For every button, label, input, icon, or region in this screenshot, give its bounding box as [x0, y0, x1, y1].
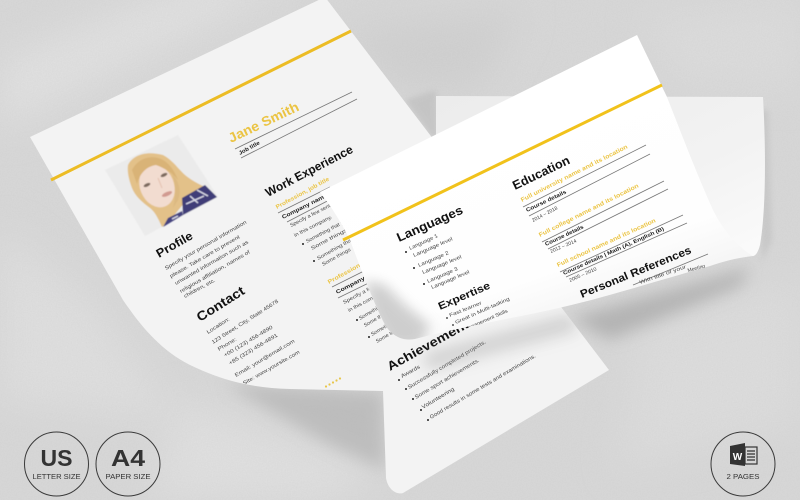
name and job title: Job title [238, 140, 261, 157]
section: personal references: With title of your [639, 264, 687, 286]
section: education: 2014 – 2018 [531, 205, 559, 224]
section: work experience: Some things [375, 324, 404, 345]
floor shadow under curled sheets [225, 90, 772, 470]
name and job title: Jane Smith [226, 99, 301, 146]
section: work experience: Specify a few sentences [289, 196, 345, 229]
section: achievements [385, 313, 537, 421]
section: languages: Language 2 [417, 250, 450, 269]
section: languages: Language level [430, 269, 471, 291]
section: work experience: Something that [316, 237, 355, 262]
section: education: Course details | Math (A), English (B) [562, 226, 665, 277]
section: contact: +00 (123) 456-4890 [223, 325, 274, 359]
section: work experience: Some things [363, 308, 392, 329]
section: languages [396, 208, 470, 289]
section: work experience: Something [370, 319, 397, 338]
yellow header rule [343, 85, 662, 240]
section: contact: Location: [206, 317, 231, 336]
section: work experience [263, 142, 404, 345]
section: work experience: Work Experience [263, 142, 356, 200]
section: work experience: in this company. [293, 214, 333, 239]
section: languages: Language level [421, 254, 463, 276]
section: work experience: Something [358, 303, 385, 322]
section: education: Education [510, 153, 572, 193]
back sheet: curled page corner on the right [436, 96, 765, 256]
section: education: Full university name and its location [520, 144, 629, 204]
section: expertise: Great in Multi-tasking [454, 296, 511, 326]
section: achievements: Good results in some tests and examinations. [429, 353, 537, 421]
badge: Word 2 pages: 2 PAGES [726, 474, 760, 481]
section: work experience: Some things [321, 247, 352, 268]
section: contact: Site: www.yoursite.com [242, 350, 301, 387]
yellow dot ornament [325, 377, 341, 388]
section: work experience: in this company [347, 289, 386, 314]
curl shading [365, 280, 430, 348]
badge: Word 2 pages [711, 432, 775, 496]
panel: top curled resume page [320, 35, 753, 348]
name and job title [226, 92, 357, 158]
section: education: 2005 – 2010 [568, 266, 598, 284]
badge: A4 paper size: A4 [111, 445, 145, 471]
section: profile [154, 220, 252, 300]
section: contact: Phone: [217, 337, 238, 353]
section: achievements: Awards [400, 364, 422, 380]
section: contact: 123 Street, City, State 45678 [211, 299, 280, 346]
section: personal references: Personal References [579, 245, 693, 301]
shadow cast by the top sheet on the left page [425, 322, 575, 362]
section: contact: Contact [194, 283, 248, 325]
section: contact: +85 (323) 456-4891 [228, 333, 279, 367]
section: languages: Language 3 [426, 266, 459, 285]
section: expertise [438, 284, 510, 328]
section: languages: Languages [395, 203, 465, 245]
section: education [510, 144, 687, 284]
yellow header rule [51, 31, 351, 180]
section: contact: Email: your@email.com [234, 339, 296, 379]
section: profile: Specify your personal information [164, 220, 248, 272]
photo: portrait of Jane Smith [105, 135, 218, 236]
section: profile: please. Take care to prevent [169, 234, 242, 280]
badge: US letter size [24, 432, 88, 496]
section: work experience: Something that you [305, 217, 351, 245]
section: work experience: Some things [310, 227, 349, 252]
badge: US letter size: LETTER SIZE [32, 474, 81, 481]
section: achievements: Some sport achievements. [414, 358, 481, 401]
panel: left resume page [30, 0, 609, 493]
section: profile: religious affiliation, names of [179, 249, 252, 295]
section: education: Full college name and its location [538, 183, 640, 239]
section: education: Full school name and its location [556, 218, 657, 269]
section: expertise: Fast learner [449, 300, 483, 319]
section: profile: children, etc. [183, 278, 217, 300]
section: profile: Profile [154, 228, 196, 261]
page sheet [30, 0, 609, 493]
icon: Word document: W [733, 452, 743, 463]
section: expertise: Management Skills [463, 308, 509, 333]
badge: A4 paper size: PAPER SIZE [106, 474, 151, 481]
page sheet [320, 35, 753, 340]
section: achievements: Volunteering [421, 387, 456, 411]
section: work experience: Profession, job title [275, 176, 331, 211]
section: education: Course details [544, 224, 585, 248]
section: work experience: Company name [281, 193, 329, 221]
section: work experience: Company name [335, 266, 384, 296]
section: languages: Language level [412, 236, 454, 259]
section: education: Course details [525, 190, 568, 214]
section: work experience: Professional [327, 260, 367, 286]
section: work experience: Specify a few [342, 283, 377, 306]
section: contact [194, 283, 301, 387]
badge: US letter size: US [40, 445, 72, 471]
section: expertise: Expertise [436, 280, 492, 313]
section: languages: Language 1 [408, 233, 439, 252]
section: achievements: Achievements [385, 313, 478, 374]
section: personal references: Meeting [687, 263, 706, 274]
section: profile: unwanted information such as [174, 239, 250, 287]
badge: A4 paper size [96, 432, 160, 496]
section: education: 2012 – 2014 [549, 238, 578, 255]
section: achievements: Successfully completed projects. [407, 339, 487, 391]
